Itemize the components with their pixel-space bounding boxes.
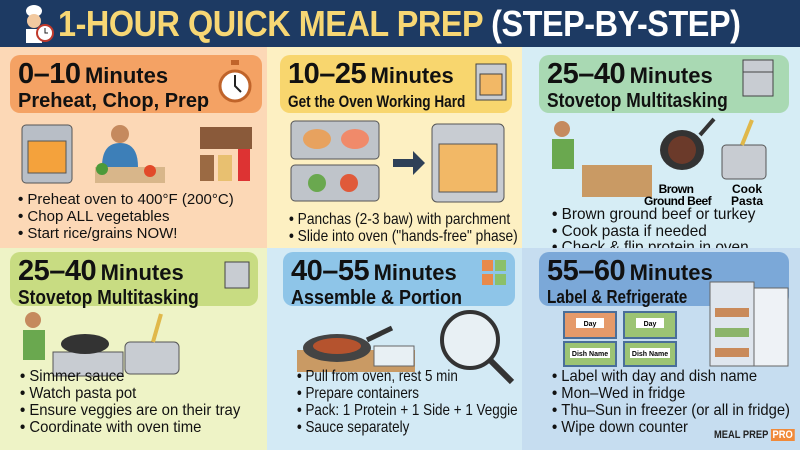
panel: 25-40 minutes top: Cook bbox=[732, 182, 762, 196]
illustration: labelled containers and fridge: Day bbox=[584, 321, 597, 328]
bullets: Brown ground beef or turkey bbox=[562, 206, 755, 223]
icon: containers bbox=[482, 260, 506, 285]
bullets: Ensure veggies are on their tray bbox=[29, 402, 240, 419]
icon: chef with clock bbox=[26, 5, 54, 43]
icon: stove bbox=[224, 262, 250, 288]
labels: Brown bbox=[659, 182, 693, 196]
bullets: Start rice/grains NOW! bbox=[27, 225, 177, 242]
bullets: Cook pasta if needed bbox=[562, 222, 707, 240]
panel: 55-60 minutes bbox=[522, 248, 800, 450]
illustration: cook, pan, pot bbox=[552, 118, 766, 197]
heading: 25–40 Minutes bbox=[547, 58, 713, 90]
bullets: Simmer sauce bbox=[29, 368, 124, 385]
heading: 40–55 Minutes bbox=[291, 255, 457, 287]
illustration: pan, containers, magnifier bbox=[297, 310, 514, 384]
heading bbox=[283, 252, 515, 306]
illustration: labelled containers and fridge bbox=[563, 282, 788, 367]
illustration: oven, cook, spices bbox=[22, 124, 252, 184]
heading bbox=[10, 55, 262, 113]
bullets bbox=[552, 206, 756, 248]
panel: 25-40 minutes top bbox=[522, 47, 800, 248]
bullets: Sauce separately bbox=[305, 419, 409, 436]
heading: Assemble & Portion bbox=[291, 287, 462, 309]
bullets: Pack: 1 Protein + 1 Side + 1 Veggie bbox=[305, 402, 518, 419]
heading: Stovetop Multitasking bbox=[18, 287, 199, 309]
illustration: labelled containers and fridge: Dish Name bbox=[632, 351, 668, 358]
bullets: Wipe down counter bbox=[561, 419, 688, 436]
heading: 25–40 Minutes bbox=[18, 255, 184, 287]
heading: 55–60 Minutes bbox=[547, 255, 713, 287]
bullets: Panchas (2-3 baw) with parchment bbox=[298, 211, 510, 228]
illustration: trays to oven bbox=[290, 120, 504, 202]
bullets bbox=[18, 191, 234, 242]
bullets: Chop ALL vegetables bbox=[27, 208, 169, 225]
heading: Get the Oven Working Hard bbox=[288, 92, 465, 111]
bullets: Watch pasta pot bbox=[29, 385, 136, 402]
heading: 10–25 Minutes bbox=[288, 58, 454, 90]
heading bbox=[10, 252, 258, 306]
bullets: Mon–Wed in fridge bbox=[561, 385, 685, 402]
icon: stove bbox=[742, 60, 774, 96]
bullets: Prepare containers bbox=[305, 385, 419, 402]
panel: 0-10 minutes bbox=[0, 47, 267, 248]
bullets: Pull from oven, rest 5 min bbox=[305, 368, 458, 385]
bullets: Coordinate with oven time bbox=[29, 419, 201, 436]
heading bbox=[280, 55, 512, 113]
illustration: cook and pot bbox=[23, 312, 180, 376]
bullets bbox=[289, 211, 518, 245]
bullets bbox=[20, 368, 240, 436]
panel: 10-25 minutes bbox=[267, 47, 522, 248]
bullets: Preheat oven to 400°F (200°C) bbox=[27, 191, 234, 208]
labels bbox=[644, 182, 712, 208]
header bar bbox=[0, 0, 800, 47]
heading: Preheat, Chop, Prep bbox=[18, 90, 209, 112]
labels: Ground Beef bbox=[644, 194, 711, 208]
heading bbox=[539, 55, 789, 113]
heading: Label & Refrigerate bbox=[547, 287, 687, 307]
heading: Stovetop Multitasking bbox=[547, 90, 728, 112]
panel: 25-40 minutes top: Pasta bbox=[731, 194, 763, 208]
brand badge: MEAL PREP PRO bbox=[714, 429, 793, 441]
icon: oven bbox=[476, 64, 506, 100]
bullets bbox=[297, 368, 518, 436]
heading bbox=[539, 252, 789, 306]
bullets: Slide into oven ("hands-free" phase) bbox=[298, 228, 518, 245]
heading: 0–10 Minutes bbox=[18, 58, 168, 90]
bullets: Thu–Sun in freezer (or all in fridge) bbox=[561, 402, 790, 419]
illustration: labelled containers and fridge: Day bbox=[644, 321, 657, 328]
bullets: Label with day and dish name bbox=[561, 368, 757, 385]
icon: stopwatch bbox=[218, 60, 252, 102]
illustration: labelled containers and fridge: Dish Name bbox=[572, 351, 608, 358]
panel: 25-40 minutes bottom bbox=[0, 248, 267, 450]
title: 1-HOUR QUICK MEAL PREP (STEP-BY-STEP) bbox=[58, 3, 740, 44]
panel: 40-55 minutes bbox=[267, 248, 522, 450]
bullets bbox=[552, 368, 790, 436]
